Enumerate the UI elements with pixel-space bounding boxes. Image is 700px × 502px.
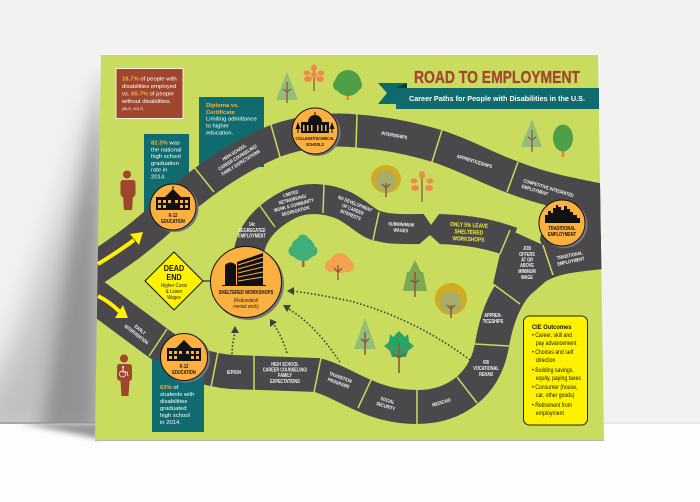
tree: yellow round middle: [371, 165, 401, 197]
stat box: diploma vs certificate: Certificate: [206, 110, 236, 116]
tree: orange leaves top: [304, 64, 324, 91]
label: competitive integrated employment: EMPLOYMENT: [521, 183, 549, 197]
label: subminimum wages: SUBMINIMUM: [388, 221, 414, 228]
dotted arrows: [231, 287, 470, 362]
label: limited networking: LIMITED: [283, 189, 300, 198]
label: high school counseling lower: EXPECTATIONS: [270, 379, 300, 384]
stat box: students with disabilities: graduated: [160, 406, 187, 412]
label: competitive integrated employment: COMPETITIVE INTEGRATED: [523, 178, 575, 199]
icon: office buildings: [222, 253, 266, 286]
icon: school: [156, 186, 190, 210]
stat box: employment rate: [116, 68, 183, 118]
label: traditional employment: TRADITIONAL: [556, 250, 583, 261]
arrow: from transition: [283, 305, 340, 362]
lower road: [80, 250, 615, 407]
job offers road segment: [493, 232, 546, 296]
node: sheltered workshops: SHELTERED WORKSHOPS: [219, 290, 273, 296]
left road end: [97, 266, 105, 300]
label: job offers: MINIMUM: [518, 269, 536, 274]
stat box: diploma vs certificate: education.: [206, 130, 234, 136]
road notches: [420, 214, 440, 244]
CIE outcomes box: [524, 316, 588, 425]
stat box: employment rate: 18.7% of people with: [122, 76, 177, 82]
label: only 5 percent leave: SHELTERED: [454, 229, 483, 237]
road dividers: [149, 114, 553, 424]
label: apprenticeships lower: TICESHIPS: [483, 319, 503, 324]
label: no development: INTERESTS: [339, 208, 362, 222]
label: no development: OF CAREER: [341, 202, 365, 216]
label: medicaid: MEDICAID: [432, 397, 452, 408]
stat box: national graduation rate: high school: [151, 154, 181, 160]
label: traditional employment: EMPLOYMENT: [557, 256, 585, 267]
arrow: from high school: [270, 319, 287, 353]
node: sheltered workshops: [210, 246, 284, 320]
stat box: national graduation rate: the national: [151, 148, 181, 154]
tree: green oval right: [553, 124, 573, 157]
stat box: diploma vs certificate: Limiting admittance: [206, 116, 257, 122]
node: college and technical schools: COLLEGE/TECHNICAL: [296, 136, 335, 141]
node: traditional employment: [539, 200, 588, 248]
tree: yellow round lower: [435, 283, 467, 318]
title: ROAD TO EMPLOYMENT: [414, 67, 580, 87]
stat box: students with disabilities: students with: [160, 392, 194, 398]
label: apprenticeships: APPRENTICESHIPS: [456, 153, 493, 169]
label: social security: SOCIAL: [380, 396, 396, 405]
stat box: students with disabilities: high school: [160, 413, 190, 419]
label: vocational rehab: VOCATIONAL: [473, 366, 499, 371]
subtitle ribbon: Career Paths for People with Disabilities in the U.S.: [409, 94, 585, 103]
node: college and technical schools: SCHOOLS: [306, 142, 324, 147]
dead end sign: & Lower: [166, 289, 183, 295]
tree: teal round: [288, 234, 318, 267]
CIE outcomes box: • Consumer (house,: [532, 385, 578, 391]
poster background: [95, 55, 604, 440]
CIE outcomes box: • Retirement from: [532, 403, 572, 409]
tree: orange leaves middle: [410, 171, 434, 202]
stat box: diploma vs certificate: to higher: [206, 124, 229, 130]
tree: pale pine right: [521, 119, 542, 152]
road network: [80, 130, 615, 407]
arrow: from IEP: [231, 326, 239, 354]
label: high school counseling lower: HIGH SCHOOL: [271, 362, 299, 367]
node: K-12 education lower: [160, 334, 210, 382]
arrow: upper yellow: [98, 232, 143, 264]
icon: person: [120, 170, 136, 210]
dead end sign: Wages: [167, 295, 181, 301]
label: segregated employment: SEGREGATED: [239, 228, 266, 233]
dead end sign: Higher Costs: [161, 283, 188, 289]
CIE outcomes box: CIE Outcomes: [532, 324, 572, 331]
node: sheltered workshops: menial work): [233, 304, 259, 310]
label: transition programs: PROGRAMS: [327, 377, 350, 390]
label: job offers: ABOVE: [520, 263, 534, 268]
stat box: national graduation rate: graduation: [151, 161, 179, 167]
dead end sign: DEAD: [164, 263, 184, 273]
node: K-12 education upper: EDUCATION: [161, 219, 185, 224]
label: internships: INTERNSHIPS: [381, 130, 408, 140]
stat box: national graduation rate: 2014.: [151, 174, 166, 180]
stat box: employment rate: without disabilities.: [121, 99, 171, 105]
label: transition programs: TRANSITION: [328, 371, 353, 384]
CIE outcomes box: car, other goods): [536, 393, 574, 399]
label: high school counseling lower: CAREER COUNSELING/: [263, 367, 308, 373]
node: traditional employment: TRADITIONAL: [548, 226, 576, 231]
icon: school: [167, 340, 201, 361]
label: early intervention: EARLY: [133, 324, 147, 336]
label: IEP/504: IEP/504: [227, 370, 241, 375]
CIE outcomes box: equity, paying taxes: [536, 376, 581, 382]
stat box: national graduation rate: rate in: [151, 168, 167, 174]
icon: city skyline: [545, 205, 580, 223]
dead end connector: [203, 280, 212, 282]
stat box: students with disabilities: 63% of: [160, 385, 179, 391]
stat box: diploma vs certificate: Diploma vs.: [206, 103, 239, 109]
stat box: students with disabilities: in 2014.: [160, 420, 181, 426]
tree: pale triangle: [354, 318, 376, 355]
tree: green with red fruit: [384, 331, 414, 373]
CIE outcomes box: pay advancement: [536, 341, 577, 347]
label: vocational rehab: REHAB: [479, 372, 494, 377]
tree: orange round: [325, 253, 354, 280]
label: job offers: OFFERS: [519, 252, 535, 257]
label: job offers: AT OR: [521, 257, 534, 263]
label: high school counseling upper: FAMILY EXPECTATIONS: [220, 148, 261, 177]
stat box: employment rate: vs. 65.7% of people: [122, 92, 174, 98]
dead end sign: END: [166, 272, 182, 282]
stat box: students with disabilities: [152, 360, 204, 432]
CIE outcomes box: • Career, skill and: [532, 333, 572, 339]
icon: person with wheelchair symbol: [117, 354, 132, 396]
node: traditional employment: EMPLOYMENT: [548, 232, 576, 237]
node: college and technical schools: [292, 108, 340, 156]
label: early intervention: INTERVENTION: [123, 323, 149, 345]
label: high school counseling lower: FAMILY: [278, 373, 292, 378]
CIE outcomes box: • Building savings,: [532, 368, 574, 374]
label: subminimum wages: WAGES: [393, 227, 408, 233]
label: limited networking: WORK & COMMUNITY: [273, 197, 315, 213]
upper road: [80, 130, 615, 279]
node: K-12 education lower: EDUCATION: [172, 370, 196, 375]
tree: green pine: [403, 260, 427, 297]
stat box: employment rate: (BLS, 2017): [122, 106, 144, 111]
label: segregated employment: 14c: [249, 222, 256, 227]
label: no development: NO DEVELOPMENT: [337, 194, 373, 213]
label: job offers: JOB: [523, 246, 532, 251]
dead end sign: [145, 252, 203, 310]
arrow: lower yellow: [98, 296, 128, 318]
node: K-12 education upper: [150, 184, 198, 232]
CIE outcomes box: • Choices and self: [532, 350, 574, 356]
right road junction: [540, 186, 602, 272]
node: K-12 education lower: K-12: [180, 364, 189, 369]
label: limited networking: SEGREGATION: [281, 205, 310, 217]
label: apprenticeships lower: APPREN-: [484, 313, 502, 318]
label: limited networking: NETWORKING/: [278, 193, 307, 206]
label: social security: SECURITY: [376, 401, 396, 412]
tree: green round top: [333, 70, 362, 100]
stat box: diploma vs certificate: [199, 97, 264, 167]
road labels: [123, 130, 585, 412]
node: K-12 education upper: K-12: [169, 213, 178, 218]
subtitle ribbon: [378, 83, 599, 109]
stat box: national graduation rate: 82.3% was: [151, 140, 180, 146]
label: only 5 percent leave: ONLY 5% LEAVE: [450, 222, 489, 230]
stat box: national graduation rate: [144, 134, 189, 214]
tree: pale pine top: [276, 72, 298, 103]
label: vocational rehab: VR/: [483, 360, 490, 365]
label: high school counseling upper: HIGH SCHOOL: [221, 143, 248, 162]
stat box: students with disabilities: disabilities: [160, 399, 187, 405]
node: sheltered workshops: (Redundant/: [234, 298, 259, 304]
label: segregated employment: EMPLOYMENT: [238, 233, 266, 239]
CIE outcomes box: employment: [536, 411, 564, 417]
label: high school counseling upper: CAREER COUNSELING/: [217, 143, 259, 172]
icon: college: [296, 112, 334, 133]
label: only 5 percent leave: WORKSHOPS: [452, 236, 485, 244]
label: job offers: WAGE: [521, 275, 533, 280]
arrow: from VR: [287, 287, 470, 360]
middle road: [247, 199, 512, 280]
CIE outcomes box: direction: [536, 358, 555, 364]
stat box: employment rate: disabilities employed: [122, 84, 176, 90]
